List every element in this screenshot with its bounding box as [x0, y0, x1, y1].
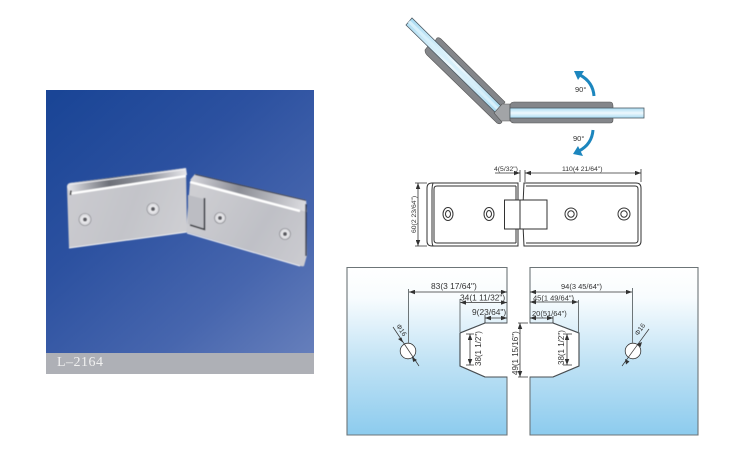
dimension: 94: 94(3 45/64")	[561, 282, 603, 291]
right hinge plate	[186, 174, 307, 266]
photo caption band: L–2164	[57, 355, 104, 370]
dimension: hole diameter 16: Φ16	[394, 323, 408, 338]
angled clamp plates	[425, 38, 505, 124]
dimension: 20: 20(51/64")	[532, 309, 567, 318]
notch edges	[460, 323, 507, 377]
photo caption band	[46, 353, 314, 374]
notch edges	[530, 323, 579, 377]
dimension: hole diameter 16: Φ16	[634, 322, 647, 337]
dimension: height 60	[411, 183, 427, 246]
right glass sheet	[530, 268, 698, 435]
dimension: gap 4	[494, 166, 520, 182]
diagram: top view of hinge on glass	[406, 18, 644, 156]
dimension: 49 vertical: 49(1 15/16")	[511, 331, 520, 375]
dimension: width 110	[525, 166, 641, 182]
dimension: 38 vertical: 38(1 1/2")	[474, 331, 483, 366]
left hinge plate	[67, 168, 187, 248]
panel: left glass cut-out drawing	[347, 268, 528, 435]
arrow: rotate up 90 degrees	[574, 71, 594, 96]
angled glass pane	[406, 18, 502, 113]
panel: product photo	[46, 90, 314, 374]
drill hole	[625, 343, 641, 359]
icon: glass door hinge	[67, 168, 307, 266]
dimension: 9: 9(23/64")	[472, 307, 506, 317]
left plate outline	[427, 183, 518, 246]
dimension: 83: 83(3 17/64")	[431, 281, 477, 291]
dimension: 38 vertical: 38(1 1/2")	[557, 330, 566, 365]
dimension: 34: 34(1 11/32")	[460, 292, 505, 302]
arrow: rotate down 90 degrees	[573, 130, 593, 156]
hinge centre rectangle	[504, 200, 547, 229]
hinge centre block	[494, 104, 510, 121]
dimension: 45: 45(1 49/64")	[533, 294, 575, 302]
drill hole	[400, 343, 416, 359]
dimension: height 60: 60(2 23/64")	[411, 196, 418, 233]
arrow: rotate up 90 degrees: 90°	[575, 85, 586, 94]
dimension: width 110: 110(4 21/64")	[562, 166, 602, 173]
left glass sheet	[347, 268, 507, 435]
hinge knuckle	[188, 195, 204, 229]
photo background	[46, 90, 314, 353]
arrow: rotate down 90 degrees: 90°	[573, 134, 584, 143]
mounting holes	[443, 208, 630, 220]
right plate outline	[523, 183, 641, 246]
dimension: gap 4: 4(5/32")	[494, 166, 518, 173]
straight glass pane	[510, 108, 644, 118]
panel: right glass cut-out drawing	[530, 268, 698, 435]
straight clamp plates	[510, 102, 613, 123]
diagram: front elevation of hinge	[411, 166, 641, 246]
dimension: hole diameter 16	[393, 323, 419, 366]
dimension: hole diameter 16	[622, 322, 649, 366]
